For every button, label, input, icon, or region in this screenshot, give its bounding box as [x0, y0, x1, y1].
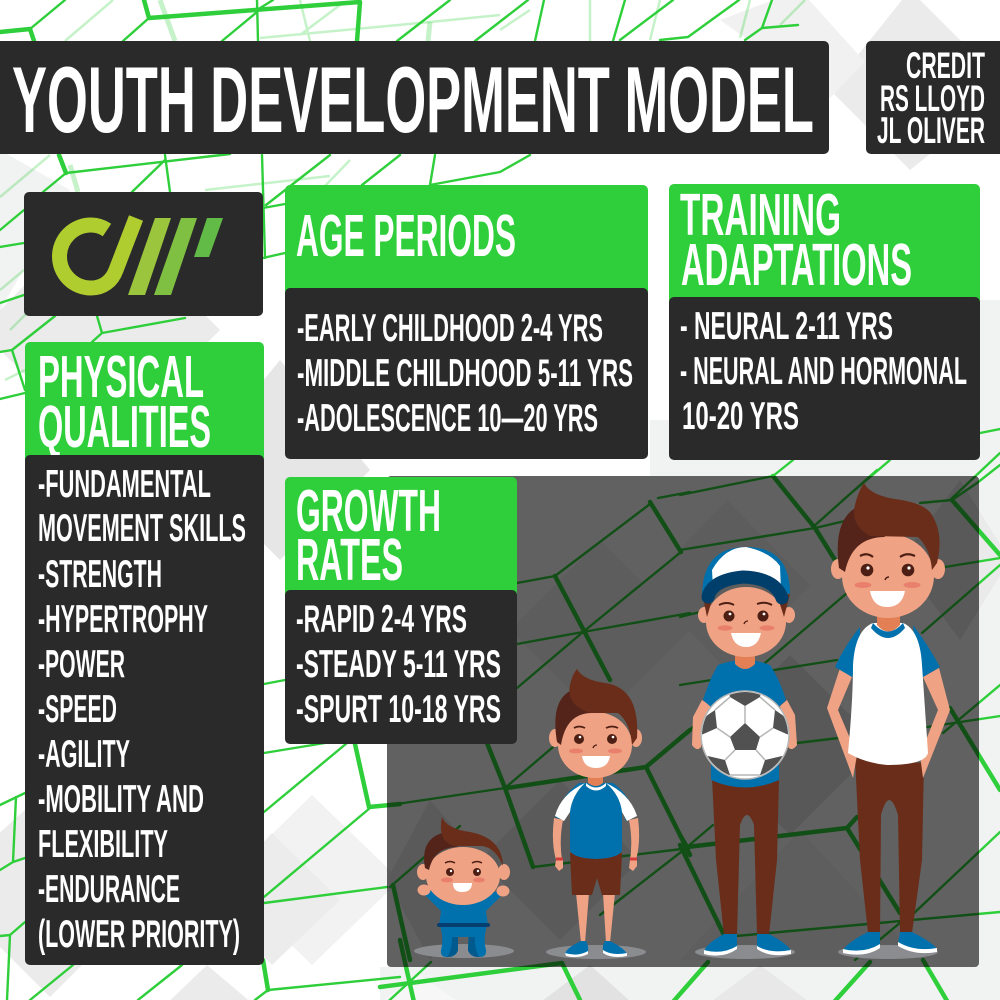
list: physical qualities: -STRENGTH: [38, 553, 162, 596]
list: physical qualities: -AGILITY: [38, 733, 130, 776]
figures: four stages of growth: [414, 483, 950, 959]
list: growth rates: -SPURT 10-18 YRS: [296, 688, 501, 731]
figure: tall adolescent: [827, 483, 950, 959]
icon: football: [700, 690, 790, 780]
list: growth rates: -STEADY 5-11 YRS: [296, 643, 501, 686]
list: age periods: -EARLY CHILDHOOD 2-4 YRS: [297, 307, 603, 350]
heading: age periods: AGE PERIODS: [296, 203, 516, 269]
figure: child in shorts: [546, 669, 646, 959]
heading: growth rates: RATES: [296, 527, 403, 593]
list: physical qualities: -FUNDAMENTAL: [38, 463, 211, 506]
heading: physical qualities: QUALITIES: [38, 394, 211, 460]
heading: growth rates: GROWTH: [296, 478, 441, 544]
list: physical qualities: -HYPERTROPHY: [38, 598, 208, 641]
list: physical qualities: -POWER: [38, 643, 125, 686]
list: training adaptations: 10-20 YRS: [682, 395, 799, 438]
list: age periods: -MIDDLE CHILDHOOD 5-11 YRS: [297, 352, 633, 395]
heading: training adaptations: [680, 182, 912, 298]
panel: growth rates: [285, 477, 517, 744]
list: age periods: -ADOLESCENCE 10—20 YRS: [297, 397, 598, 440]
logo mark: [60, 218, 223, 295]
panel: physical qualities: [25, 342, 264, 965]
figure: boy with cap and football: [690, 547, 800, 959]
list: growth rates: [296, 598, 501, 731]
list: training adaptations: [680, 305, 967, 438]
heading: physical qualities: [38, 344, 211, 460]
list: physical qualities: [38, 463, 246, 956]
panel: training adaptations: [669, 182, 980, 460]
credit panel: [866, 41, 1000, 154]
list: growth rates: -RAPID 2-4 YRS: [296, 598, 467, 641]
list: physical qualities: (LOWER PRIORITY): [38, 913, 240, 956]
title banner: [0, 41, 829, 154]
figure: toddler: [414, 817, 514, 958]
list: physical qualities: -ENDURANCE: [38, 868, 180, 911]
heading: training adaptations: TRAINING: [680, 182, 841, 248]
image panel background: [387, 476, 979, 967]
panel: age periods: [285, 185, 648, 459]
list: physical qualities: -SPEED: [38, 688, 117, 731]
heading: physical qualities: PHYSICAL: [38, 344, 204, 410]
logo panel: [24, 192, 263, 316]
list: age periods: [297, 307, 633, 440]
list: physical qualities: MOVEMENT SKILLS: [38, 507, 246, 550]
list: physical qualities: FLEXIBILITY: [38, 823, 168, 866]
heading: growth rates: [296, 478, 441, 593]
list: physical qualities: -MOBILITY AND: [38, 778, 204, 821]
